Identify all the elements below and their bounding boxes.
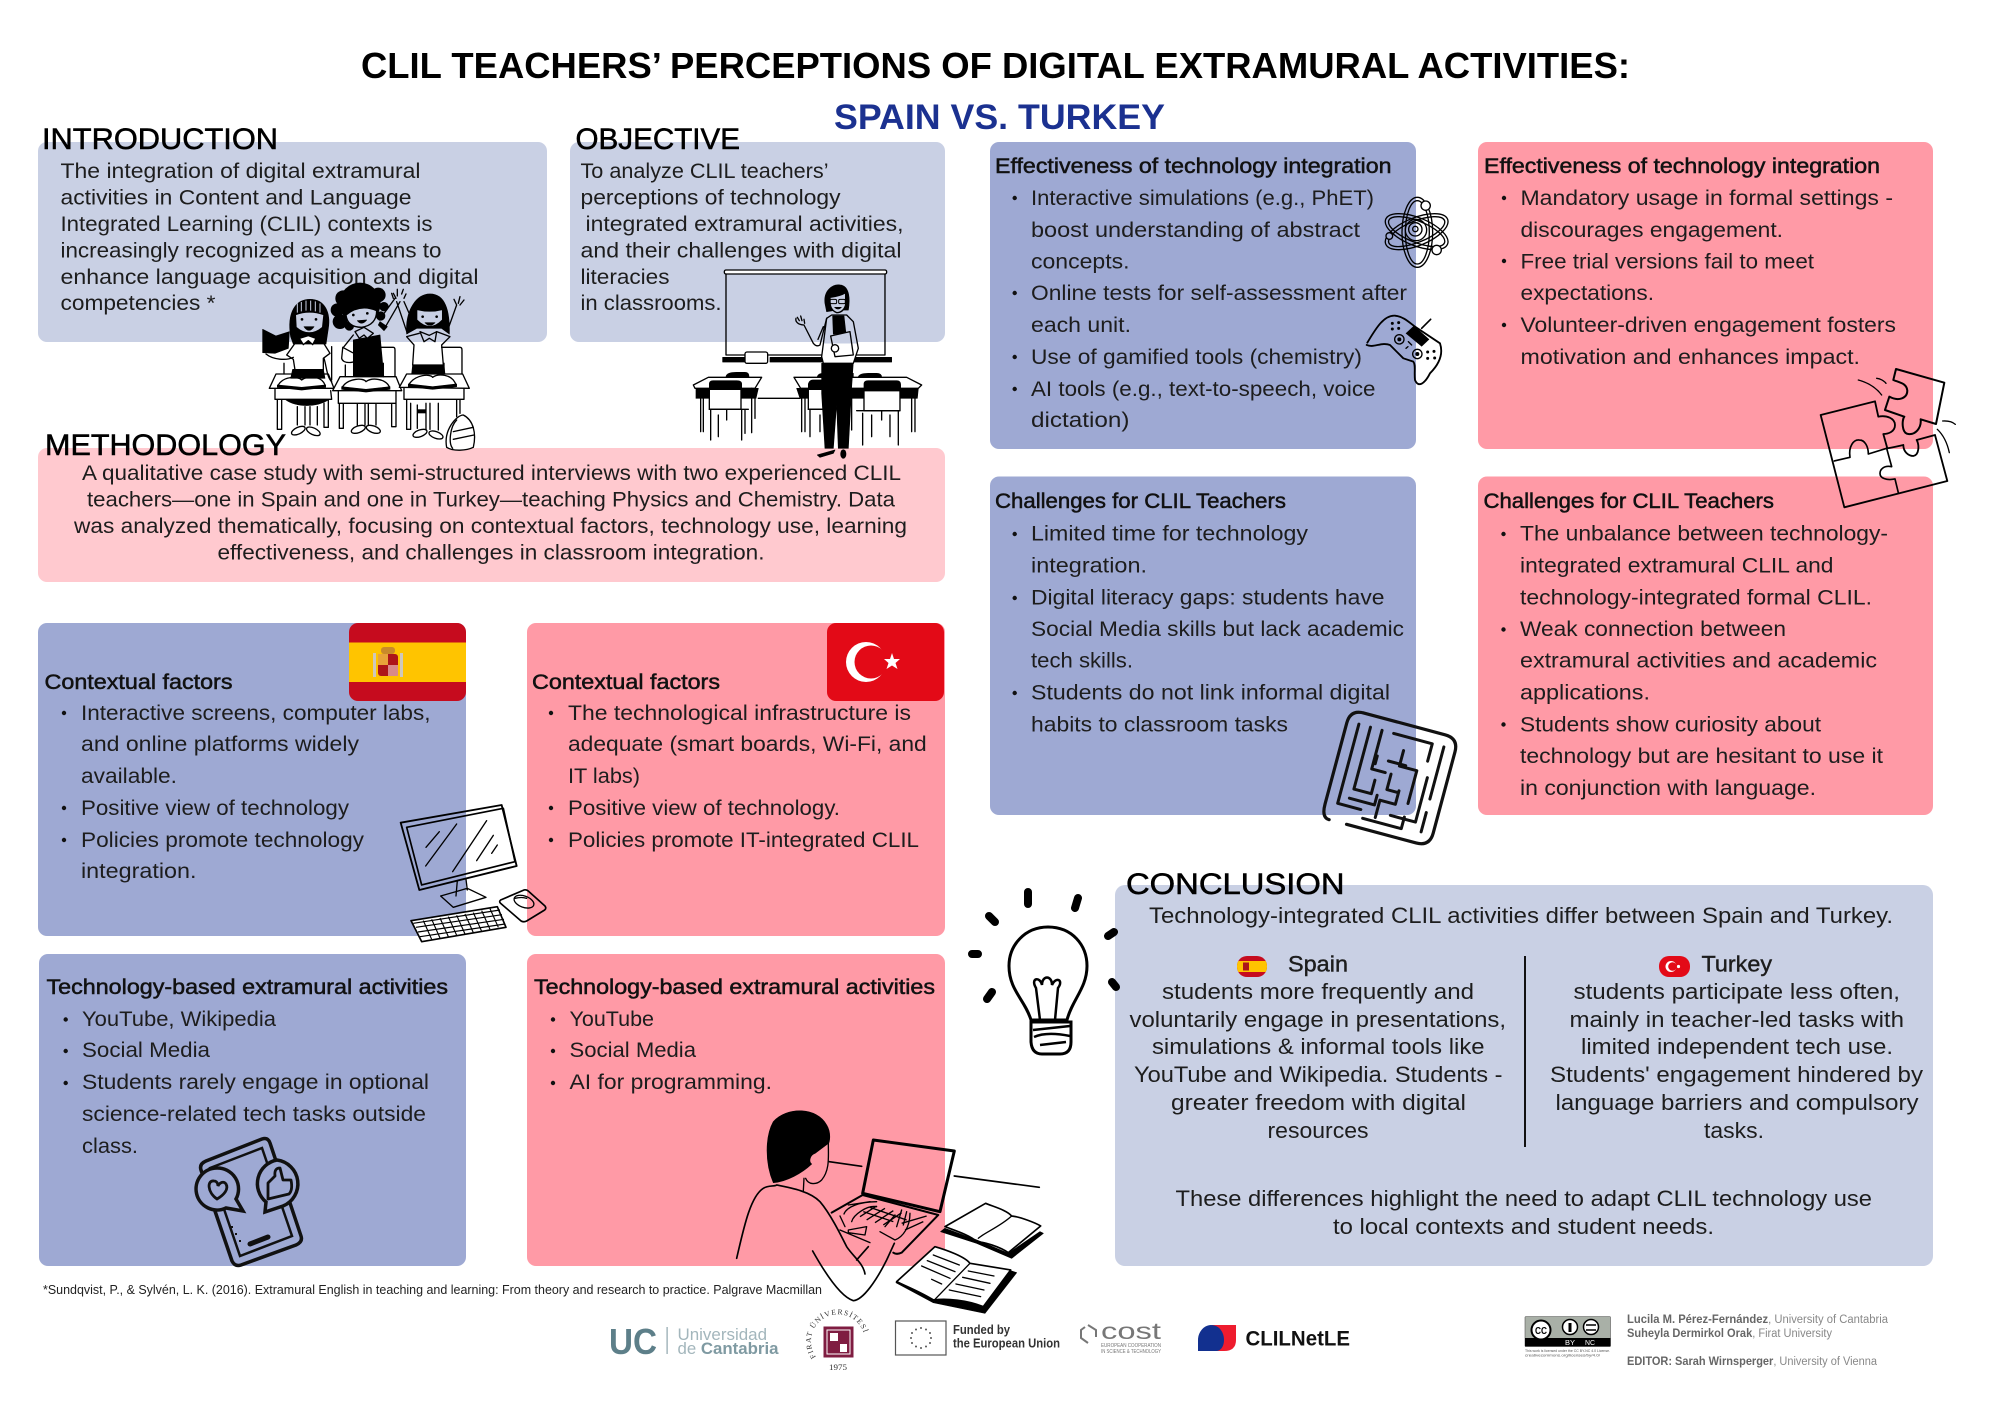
text: objective body: and their challenges with digital [580, 240, 902, 262]
list: contextual factors Turkey: Policies promote IT-integrated CLIL [568, 829, 919, 852]
column: Spain conclusion: resources [1268, 1118, 1368, 1143]
column: Spain conclusion: Spain [1288, 952, 1348, 976]
list: challenges Turkey: Weak connection between [1520, 618, 1786, 641]
column: Turkey conclusion: limited independent tech use. [1581, 1034, 1893, 1059]
list: contextual factors Turkey: adequate (smart boards, Wi-Fi, and [568, 733, 927, 756]
column: Spain conclusion: greater freedom with digital [1171, 1090, 1466, 1115]
list: challenges Spain: tech skills. [1031, 650, 1133, 672]
list: technology-based activities Spain: Students rarely engage in optional [82, 1071, 429, 1094]
column: Turkey conclusion: mainly in teacher-led tasks with [1570, 1007, 1904, 1032]
list: effectiveness Spain: AI tools (e.g., text-to-speech, voice [1031, 378, 1376, 401]
heading: contextual factors Spain: Contextual factors [44, 671, 232, 694]
text: introduction body: activities in Content and Language [60, 186, 412, 210]
logo: Universidad de Cantabria: Universidad [678, 1325, 767, 1344]
icon: Creative Commons licence badge: NC [1585, 1340, 1595, 1347]
panel: introduction [38, 123, 547, 342]
list: challenges Spain: habits to classroom tasks [1031, 714, 1288, 736]
text: methodology body: teachers—one in Spain and one in Turkey—teaching Physics and Chemistry. Data [87, 488, 895, 512]
heading: introduction: INTRODUCTION [42, 123, 278, 156]
list: effectiveness Spain: dictation) [1031, 409, 1130, 432]
list: technology-based activities Turkey: AI for programming. [570, 1071, 772, 1094]
text: objective body: perceptions of technology [580, 186, 841, 210]
icon: Spain flag [349, 623, 466, 701]
icon: Turkey flag [827, 623, 944, 701]
logo: Funded by the European Union [896, 1321, 1060, 1355]
list: effectiveness Turkey: Free trial versions fail to meet [1520, 250, 1814, 274]
list: challenges Spain: integration. [1031, 554, 1147, 578]
list: technology-based activities Spain: Social Media [82, 1039, 210, 1062]
column: Spain conclusion: students more frequently and [1162, 979, 1474, 1004]
text: authors and editor [1627, 1314, 1889, 1368]
logo: Firat University seal: FIRAT ÜNİVERSİTESİ [806, 1309, 869, 1360]
list: contextual factors Spain: integration. [81, 860, 196, 883]
list: technology-based activities Spain: class. [82, 1135, 138, 1158]
panel: Turkey effectiveness [1478, 142, 1933, 449]
list: contextual factors Turkey: IT labs) [568, 765, 640, 788]
column: Turkey conclusion: Turkey [1702, 952, 1772, 976]
list: effectiveness Spain: boost understanding of abstract [1031, 219, 1360, 242]
heading: methodology: METHODOLOGY [45, 429, 286, 462]
list: effectiveness Turkey: discourages engagement. [1520, 219, 1783, 242]
panel: objective [570, 123, 945, 342]
column: Spain conclusion [1130, 952, 1506, 1143]
text: introduction body: Integrated Learning (CLIL) contexts is [60, 213, 432, 236]
icon: Creative Commons licence badge: BY [1565, 1340, 1575, 1347]
icon: students at desks [263, 283, 475, 450]
list: challenges Spain [1012, 522, 1404, 736]
list: challenges Spain: Social Media skills but lack academic [1031, 618, 1404, 641]
heading: objective: OBJECTIVE [576, 123, 740, 156]
list: challenges Turkey: technology but are hesitant to use it [1520, 745, 1883, 768]
text: introduction body: competencies * [60, 292, 216, 315]
list: challenges Turkey: extramural activities and academic [1520, 650, 1877, 672]
list: technology-based activities Spain [63, 1008, 429, 1158]
list: contextual factors Turkey [549, 702, 927, 852]
text: methodology body: A qualitative case study with semi-structured interviews with two experienced CLIL [82, 462, 901, 485]
list: contextual factors Spain: Policies promote technology [81, 829, 365, 852]
icon: game controller [1367, 316, 1441, 384]
text: authors and editor: EDITOR: Sarah Wirnsperger, University of Vienna [1627, 1356, 1878, 1368]
list: effectiveness Spain: Interactive simulations (e.g., PhET) [1031, 187, 1374, 210]
list: technology-based activities Turkey: YouTube [570, 1008, 654, 1031]
column: Spain conclusion: voluntarily engage in presentations, [1130, 1007, 1506, 1032]
logo: CLILNetLE: CLILNetLE [1246, 1328, 1350, 1350]
list: effectiveness Turkey: Mandatory usage in formal settings - [1520, 187, 1893, 210]
text: authors and editor: Lucila M. Pérez-Fernández, University of Cantabria [1627, 1314, 1889, 1326]
list: effectiveness Spain: Online tests for self-assessment after [1031, 282, 1407, 305]
logo: CLILNetLE [1198, 1325, 1350, 1351]
icon: person on laptop with books [737, 1111, 1043, 1313]
text: objective body [580, 160, 904, 315]
list: challenges Turkey [1501, 522, 1888, 800]
text: introduction body: The integration of digital extramural [60, 160, 420, 183]
list: effectiveness Turkey: Volunteer-driven engagement fosters [1520, 314, 1896, 337]
text: methodology body: was analyzed thematically, focusing on contextual factors, technology use, learning [73, 515, 907, 538]
text: introduction body: enhance language acquisition and digital [60, 266, 478, 289]
list: challenges Spain: Students do not link informal digital [1031, 682, 1390, 704]
title: CLIL TEACHERS’ PERCEPTIONS OF DIGITAL EXTRAMURAL ACTIVITIES: [361, 45, 1630, 86]
heading: contextual factors Turkey: Contextual factors [532, 671, 720, 694]
title [361, 45, 1630, 137]
list: challenges Turkey: technology-integrated formal CLIL. [1520, 586, 1872, 610]
text: conclusion closing: These differences highlight the need to adapt CLIL technology use [1176, 1186, 1872, 1211]
list: challenges Turkey: Students show curiosity about [1520, 714, 1821, 736]
list: effectiveness Turkey [1502, 187, 1896, 369]
panel: Spain contextual factors [38, 623, 466, 936]
heading: conclusion: CONCLUSION [1126, 868, 1344, 901]
footnote: *Sundqvist, P., & Sylvén, L. K. (2016). Extramural English in teaching and learning: From theory and research to practice. Palgrave Macmillan [43, 1283, 822, 1297]
logo: COST: IN SCIENCE & TECHNOLOGY [1101, 1349, 1161, 1355]
list: technology-based activities Spain: science-related tech tasks outside [82, 1103, 426, 1126]
icon: atom [1381, 197, 1453, 267]
text: introduction body [60, 160, 478, 315]
column: Turkey conclusion: tasks. [1704, 1118, 1764, 1143]
text: methodology body: effectiveness, and challenges in classroom integration. [218, 542, 764, 564]
list: technology-based activities Spain: YouTube, Wikipedia [82, 1008, 276, 1031]
column: Spain conclusion: YouTube and Wikipedia. Students - [1134, 1062, 1502, 1087]
logo: Funded by the European Union: the European Union [953, 1336, 1060, 1350]
list: challenges Turkey: applications. [1520, 682, 1650, 704]
icon: teacher and classroom [693, 270, 922, 459]
list: contextual factors Spain: available. [81, 765, 177, 788]
column: Turkey conclusion: language barriers and compulsory [1556, 1090, 1918, 1115]
logo: Universidad de Cantabria: de Cantabria [678, 1339, 779, 1358]
text: authors and editor: Suheyla Dermirkol Orak, Firat University [1627, 1328, 1832, 1340]
icon: puzzle [1821, 369, 1955, 507]
panel: Spain technology-based activities [39, 954, 466, 1266]
logo: Funded by the European Union: Funded by [953, 1323, 1010, 1337]
icon: Creative Commons licence badge: This work is licensed under the CC BY-NC 4.0 License. [1525, 1349, 1610, 1353]
list: challenges Turkey: The unbalance between technology- [1520, 522, 1888, 546]
icon: phone with likes [196, 1138, 301, 1266]
list: contextual factors Spain: Positive view of technology [81, 797, 350, 820]
text: objective body: literacies [580, 266, 670, 289]
column: Turkey conclusion: students participate less often, [1574, 979, 1900, 1004]
list: effectiveness Spain [1012, 187, 1407, 432]
list: contextual factors Spain: Interactive screens, computer labs, [81, 702, 430, 725]
list: effectiveness Spain: concepts. [1031, 250, 1130, 274]
icon: Creative Commons licence badge: creativecommons.org/licenses/by/4.0/ [1525, 1354, 1600, 1358]
list: challenges Spain: Digital literacy gaps: students have [1031, 586, 1384, 610]
logo: COST: cost [1101, 1318, 1162, 1344]
list: effectiveness Turkey: motivation and enhances impact. [1520, 346, 1860, 369]
panel: Turkey technology-based activities [527, 954, 945, 1266]
icon: Creative Commons licence badge: CC [1535, 1326, 1547, 1337]
panel: Spain effectiveness [990, 142, 1416, 449]
heading: effectiveness Spain: Effectiveness of technology integration [995, 155, 1392, 178]
heading: challenges Turkey: Challenges for CLIL Teachers [1484, 490, 1774, 513]
column: Turkey conclusion: Students' engagement hindered by [1550, 1062, 1923, 1087]
text: conclusion lead: Technology-integrated CLIL activities differ between Spain and Turkey. [1149, 903, 1893, 928]
column: Turkey conclusion [1550, 952, 1923, 1143]
logo: Firat University seal: 1975 [829, 1363, 847, 1372]
text: objective body: in classrooms. [580, 292, 722, 315]
logo: Universidad de Cantabria [609, 1321, 779, 1362]
title: SPAIN VS. TURKEY [834, 98, 1165, 137]
icon: Creative Commons licence badge [1525, 1316, 1610, 1358]
heading: technology-based activities Turkey: Technology-based extramural activities [534, 976, 935, 999]
text: objective body: To analyze CLIL teachers’ [580, 160, 828, 183]
list: effectiveness Turkey: expectations. [1520, 282, 1654, 305]
panel: methodology [38, 429, 945, 582]
heading: challenges Spain: Challenges for CLIL Teachers [995, 490, 1286, 513]
text: conclusion closing [1176, 1186, 1872, 1239]
list: contextual factors Spain [62, 702, 431, 883]
list: contextual factors Turkey: Positive view of technology. [568, 797, 840, 820]
list: contextual factors Spain: and online platforms widely [81, 733, 360, 756]
list: contextual factors Turkey: The technological infrastructure is [568, 702, 911, 725]
icon: computer [401, 805, 546, 942]
column: Spain conclusion: simulations & informal tools like [1152, 1034, 1484, 1059]
heading: effectiveness Turkey: Effectiveness of technology integration [1484, 155, 1880, 178]
icon: maze [1321, 709, 1459, 847]
logo: COST: EUROPEAN COOPERATION [1101, 1343, 1161, 1349]
list: technology-based activities Turkey: Social Media [570, 1039, 696, 1062]
text: methodology body [73, 462, 907, 564]
list: effectiveness Spain: each unit. [1031, 314, 1131, 337]
list: effectiveness Spain: Use of gamified tools (chemistry) [1031, 346, 1362, 369]
text: conclusion closing: to local contexts and student needs. [1333, 1214, 1714, 1239]
heading: technology-based activities Spain: Technology-based extramural activities [46, 976, 448, 999]
list: challenges Turkey: integrated extramural CLIL and [1520, 554, 1834, 578]
panel: Turkey challenges [1478, 476, 1933, 815]
text: objective body: integrated extramural activities, [586, 213, 904, 236]
list: technology-based activities Turkey [551, 1008, 772, 1094]
logo: Universidad de Cantabria: UC [609, 1321, 657, 1362]
panel: Spain challenges [990, 476, 1416, 815]
list: challenges Spain: Limited time for technology [1031, 522, 1309, 546]
text: introduction body: increasingly recognized as a means to [60, 240, 442, 262]
list: challenges Turkey: in conjunction with language. [1520, 777, 1816, 800]
icon: light bulb [972, 892, 1116, 1054]
panel: conclusion [1115, 868, 1933, 1266]
logo: COST [1081, 1318, 1162, 1355]
panel: Turkey contextual factors [527, 623, 945, 936]
